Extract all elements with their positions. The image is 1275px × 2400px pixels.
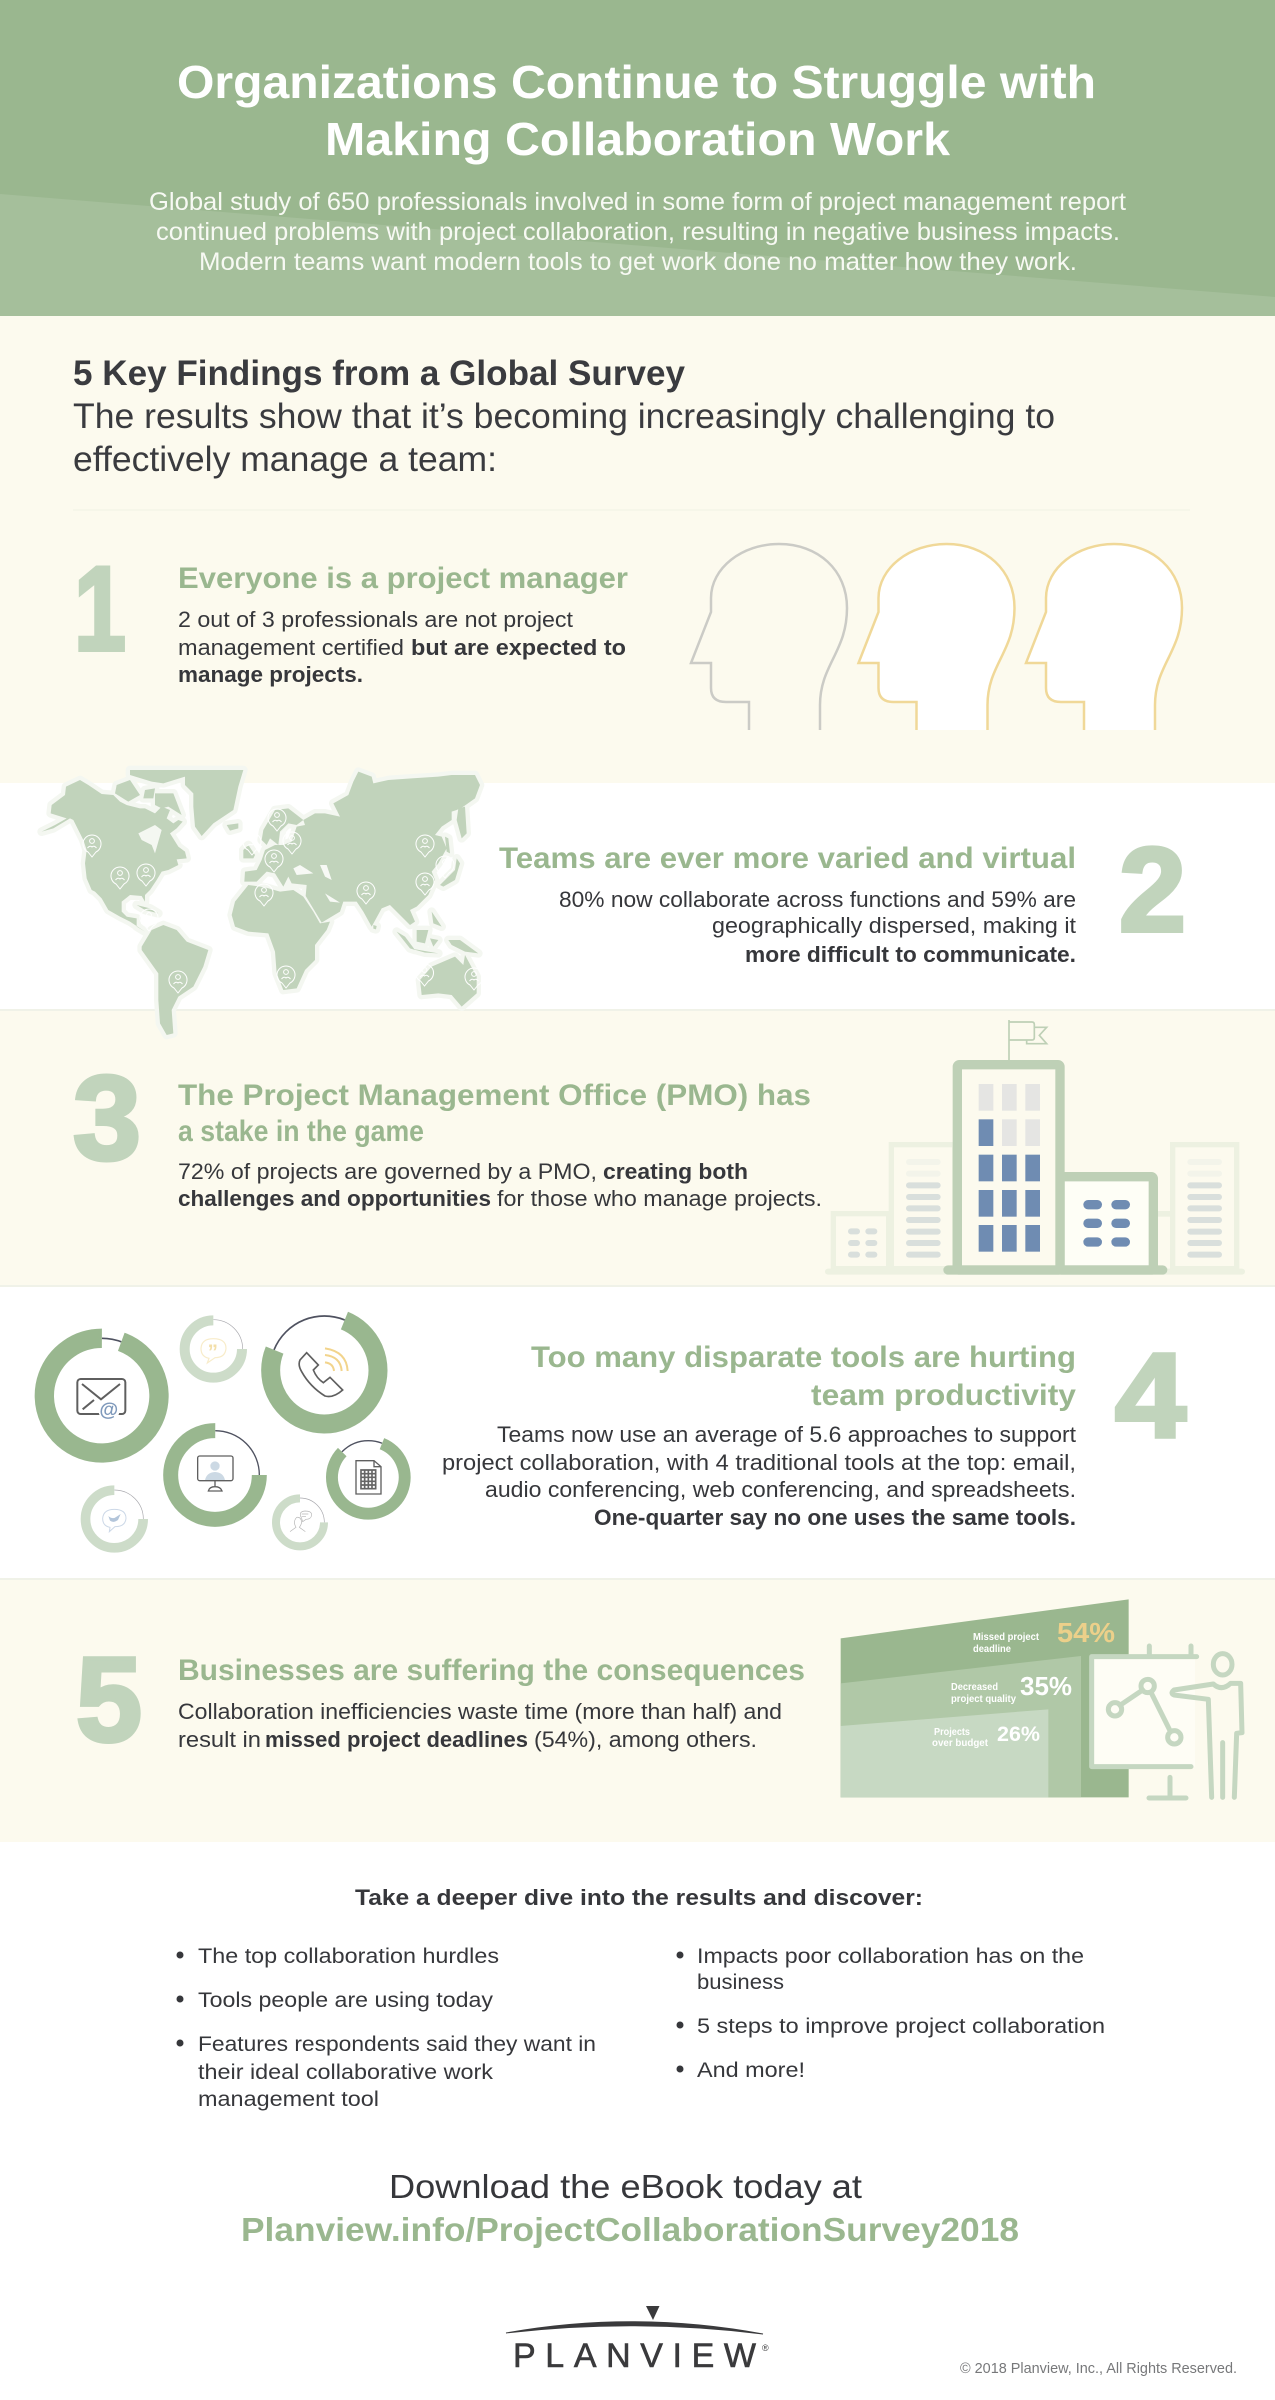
panel: finding 2 <box>42 770 1186 1035</box>
body 4: One-quarter say no one uses the same tools. <box>594 1505 1076 1530</box>
copyright: © 2018 Planview, Inc., All Rights Reserved. <box>960 2361 1237 2377</box>
panel: finding 3 <box>73 1020 1245 1275</box>
number 5: 5 <box>76 1633 142 1767</box>
body 3: for those who manage projects. <box>497 1186 822 1211</box>
section heading <box>73 354 1055 479</box>
donut: phone <box>254 1300 394 1440</box>
call to action heading: Take a deeper dive into the results and discover: <box>355 1885 923 1910</box>
body 1: manage projects. <box>178 662 363 687</box>
bullet list: left column: Tools people are using today <box>198 1988 493 2012</box>
body 2: 80% now collaborate across functions and 59% are <box>559 887 1076 912</box>
download call to action: Planview.info/ProjectCollaborationSurvey2018 <box>241 2211 1019 2248</box>
world map <box>42 770 483 1035</box>
title <box>177 56 1096 165</box>
heading 4 <box>531 1341 1076 1412</box>
bullet list: left column: Features respondents said they want in <box>198 2032 596 2056</box>
heading 3: a stake in the game <box>178 1115 424 1148</box>
body 3: creating both <box>603 1159 748 1184</box>
stepped impact chart with presenter <box>841 1599 1242 1798</box>
number 1: 1 <box>74 542 126 676</box>
map location pins <box>83 809 483 993</box>
heading 5: Businesses are suffering the consequences <box>178 1654 805 1687</box>
body 5: result in <box>178 1727 261 1752</box>
donut: quote chat: ” <box>208 1340 218 1363</box>
panel: finding 5 <box>76 1599 1242 1798</box>
body 5: Collaboration inefficiencies waste time (more than half) and <box>178 1699 782 1724</box>
body 4: Teams now use an average of 5.6 approaches to support <box>497 1422 1077 1447</box>
donut: email <box>28 1322 175 1469</box>
icon: office buildings with flag <box>825 1020 1245 1275</box>
donut: monitor <box>171 1431 259 1519</box>
download call to action: Download the eBook today at <box>389 2168 862 2205</box>
bullet list: right column: business <box>697 1970 784 1994</box>
bullet list: right column: 5 steps to improve project collaboration <box>697 2014 1105 2038</box>
logo: Planview <box>506 2306 769 2375</box>
icon: three heads <box>691 544 1182 730</box>
heading 1: Everyone is a project manager <box>178 562 628 595</box>
donut: quote chat <box>184 1320 243 1378</box>
body 3 <box>178 1159 822 1211</box>
body 3: 72% of projects are governed by a PMO, <box>178 1159 597 1184</box>
section heading: 5 Key Findings from a Global Survey <box>73 354 686 393</box>
logo: Planview: PLANVIEW <box>513 2337 756 2375</box>
chart label: 54%: deadline <box>973 1643 1011 1655</box>
body 2: more difficult to communicate. <box>745 942 1076 967</box>
bullet list: left column: The top collaboration hurdles <box>198 1944 499 1968</box>
body 5 <box>178 1699 782 1752</box>
body 1 <box>178 607 626 687</box>
heading 4: Too many disparate tools are hurting <box>531 1341 1076 1374</box>
heading 3: The Project Management Office (PMO) has <box>178 1079 811 1112</box>
body 1: 2 out of 3 professionals are not project <box>178 607 574 632</box>
chart label: 54%: Missed project <box>973 1631 1039 1643</box>
body 1: but are expected to <box>411 635 626 660</box>
donut: people chat <box>276 1498 324 1547</box>
logo: Planview: ® <box>762 2343 769 2353</box>
donut icons <box>28 1300 416 1548</box>
donut: email: @ <box>99 1400 118 1421</box>
chart label: 35%: Decreased <box>951 1681 998 1693</box>
chart label: 54% <box>973 1617 1115 1655</box>
donut: spreadsheet <box>321 1430 416 1525</box>
header banner <box>0 0 1275 316</box>
title: Making Collaboration Work <box>325 113 950 165</box>
body 2: geographically dispersed, making it <box>712 913 1077 938</box>
chart label: 26%: Projects <box>934 1726 970 1738</box>
body 5: (54%), among others. <box>534 1727 757 1752</box>
bullet list: right column: And more! <box>697 2058 805 2082</box>
chart label: 35% <box>951 1671 1072 1705</box>
chart label: 26%: over budget <box>932 1737 988 1749</box>
download call to action <box>241 2168 1019 2248</box>
panel: finding 4 <box>28 1300 1186 1548</box>
body 1: management certified <box>178 635 404 660</box>
bullet list: left column: management tool <box>198 2087 379 2111</box>
bullet list: right column: Impacts poor collaboration has on the <box>697 1944 1084 1968</box>
bullet list: left column <box>176 1944 596 2111</box>
bullet list: left column: their ideal collaborative work <box>198 2060 493 2084</box>
body 4 <box>442 1422 1077 1530</box>
panel: finding 1 <box>74 542 1182 730</box>
section heading: The results show that it’s becoming increasingly challenging to <box>73 397 1055 436</box>
body 5: missed project deadlines <box>265 1727 528 1752</box>
number 4: 4 <box>1115 1329 1186 1463</box>
header intro text: continued problems with project collaboration, resulting in negative business impacts. <box>156 218 1120 246</box>
heading 4: team productivity <box>811 1379 1076 1412</box>
body 3: challenges and opportunities <box>178 1186 491 1211</box>
body 2 <box>559 887 1077 967</box>
heading 2: Teams are ever more varied and virtual <box>499 842 1076 875</box>
chart label: 54%: 54% <box>1057 1617 1115 1648</box>
header intro text <box>149 188 1126 276</box>
body 4: audio conferencing, web conferencing, and spreadsheets. <box>485 1477 1076 1502</box>
chart label: 26% <box>932 1723 1040 1749</box>
chart label: 26%: 26% <box>997 1723 1040 1746</box>
chart label: 35%: project quality <box>951 1693 1016 1705</box>
chart label: 35%: 35% <box>1020 1671 1072 1701</box>
body 4: project collaboration, with 4 traditional tools at the top: email, <box>442 1450 1076 1475</box>
title: Organizations Continue to Struggle with <box>177 56 1096 108</box>
header intro text: Global study of 650 professionals involved in some form of project management report <box>149 188 1126 216</box>
number 2: 2 <box>1119 823 1186 957</box>
number 3: 3 <box>73 1051 141 1185</box>
section heading: effectively manage a team: <box>73 440 497 479</box>
header intro text: Modern teams want modern tools to get work done no matter how they work. <box>199 248 1077 276</box>
donut: bird chat <box>85 1490 143 1548</box>
heading 3 <box>178 1079 811 1148</box>
bullet list: right column <box>676 1944 1105 2082</box>
